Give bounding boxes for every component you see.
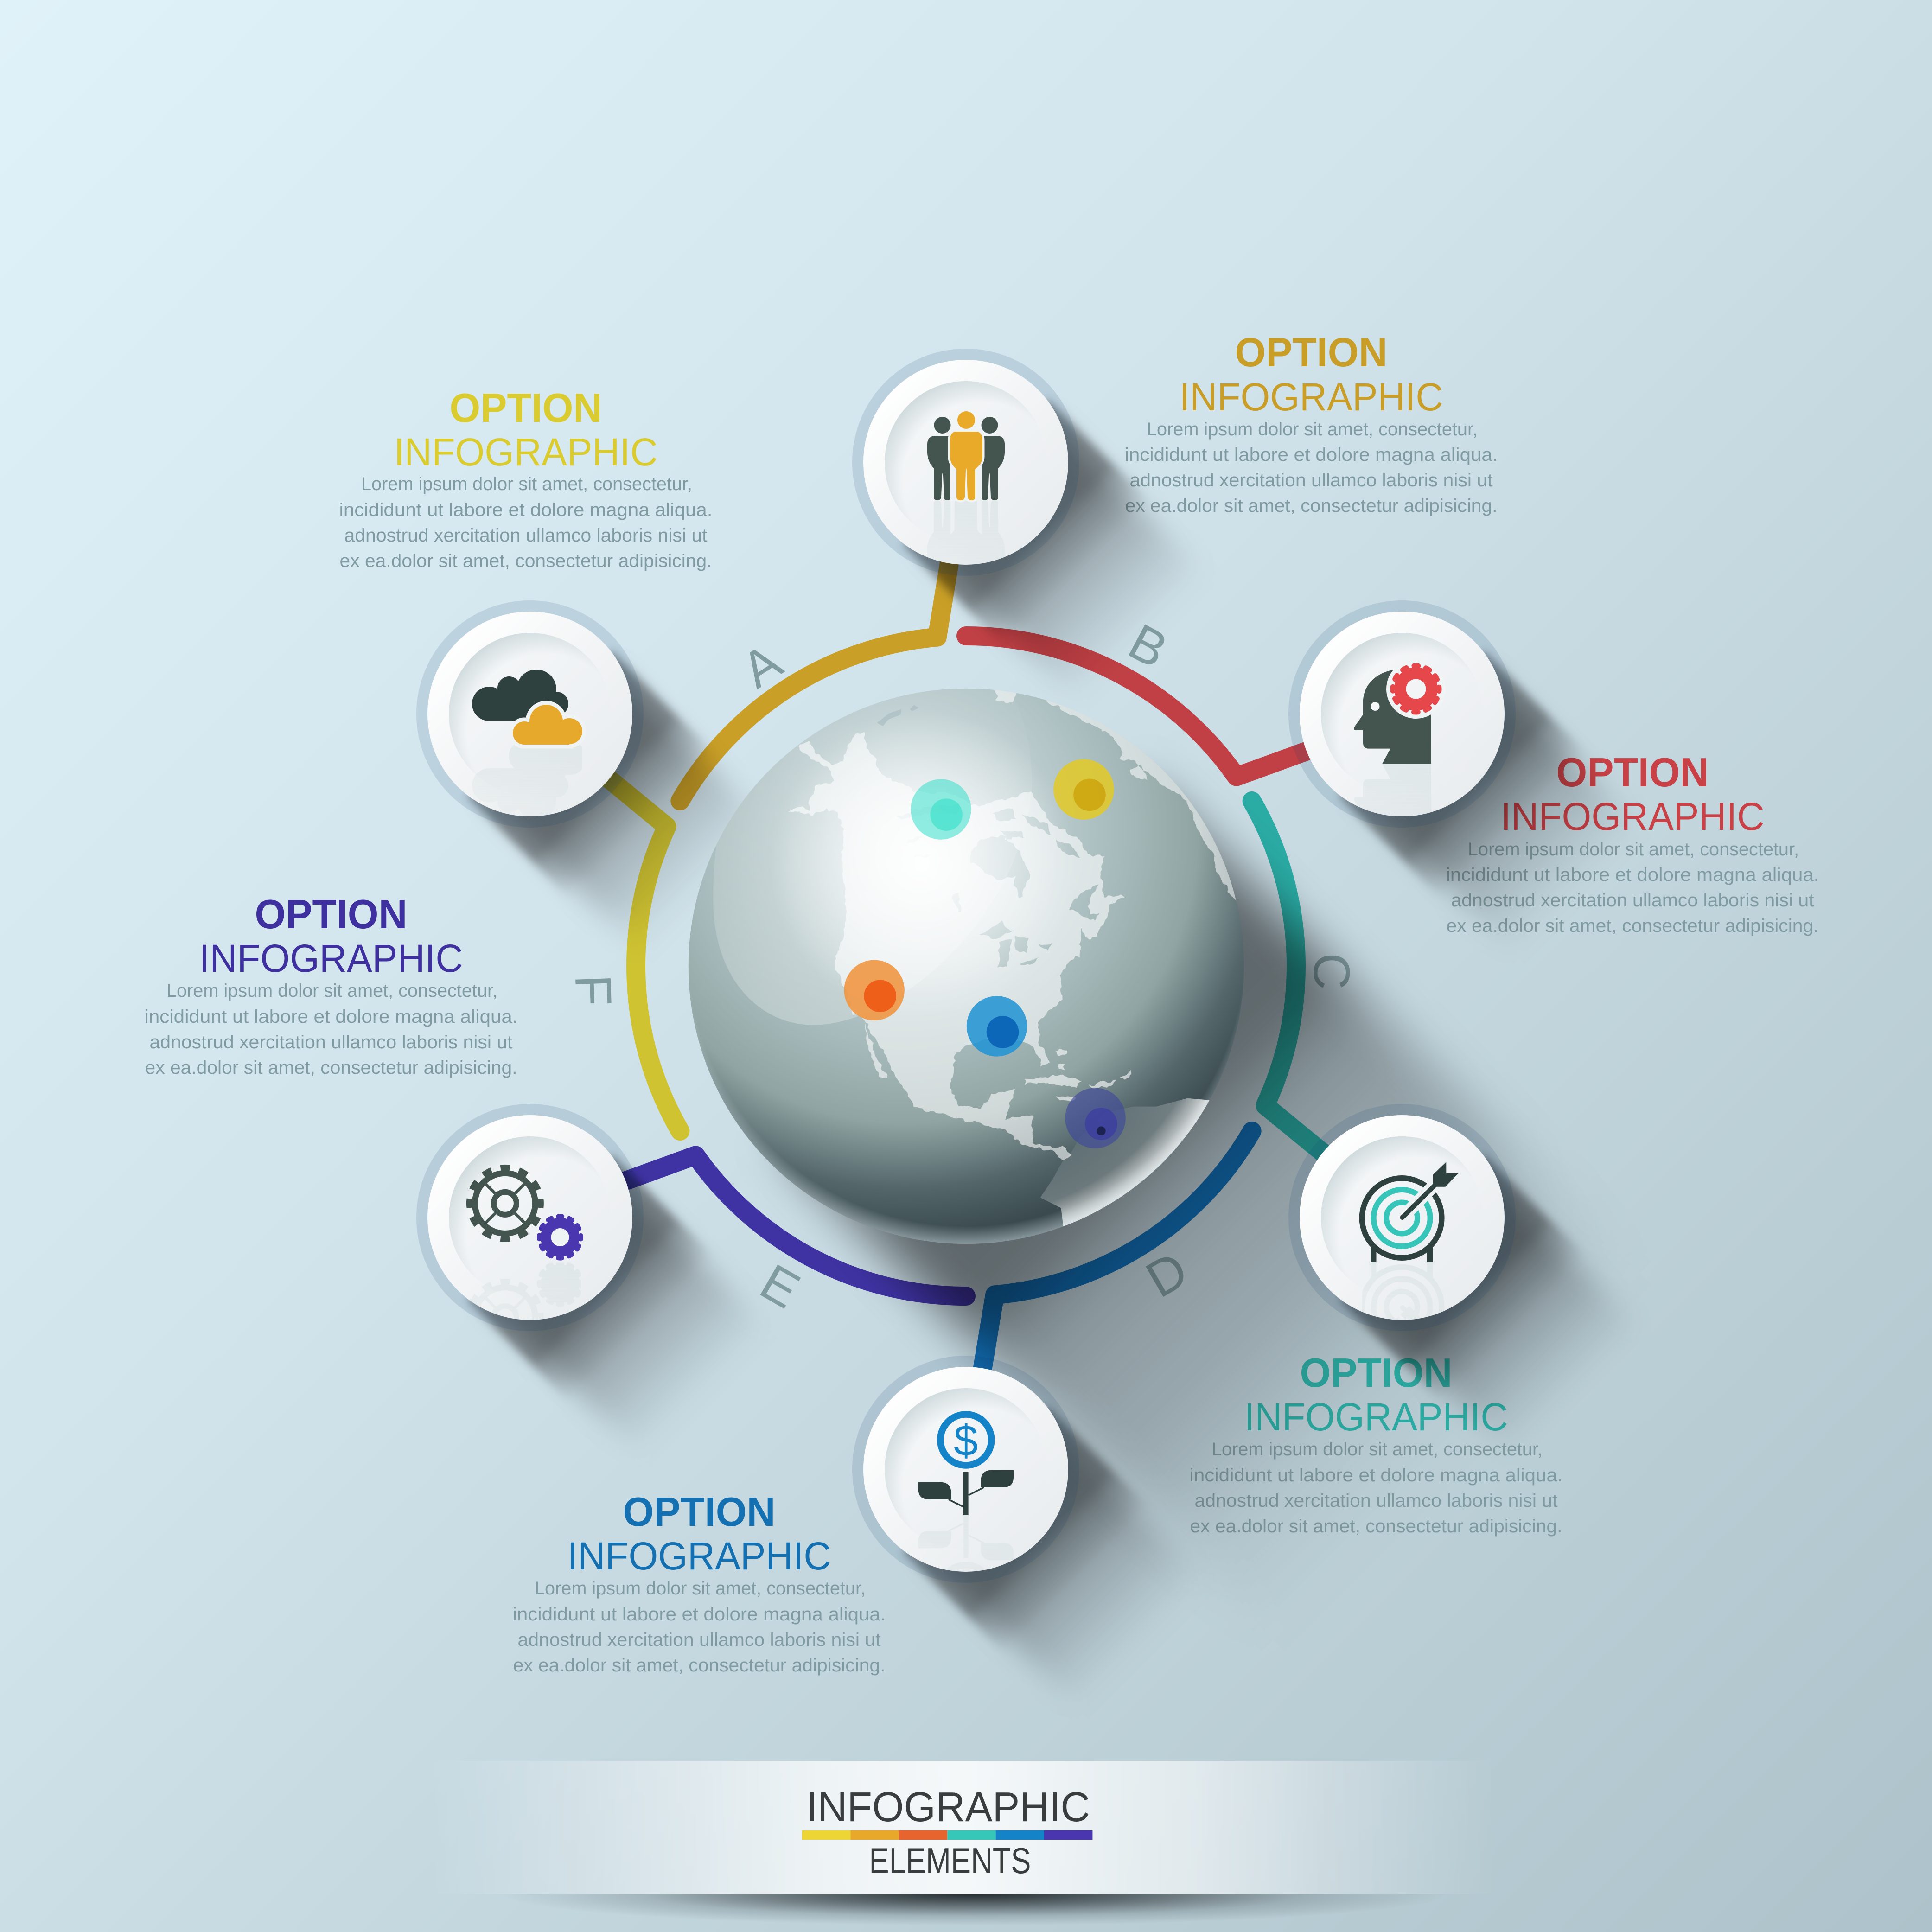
- text block red: incididunt ut labore et dolore magna aliqua.: [1446, 865, 1819, 885]
- heading: option gold: [1180, 329, 1443, 419]
- panel: option text blue: [513, 1489, 886, 1676]
- text block blue: adnostrud xercitation ullamco laboris nisi ut: [517, 1630, 881, 1650]
- text block gold: ex ea.dolor sit amet, consectetur adipisicing.: [1125, 496, 1498, 516]
- text block yellow: [339, 474, 712, 571]
- text block purple: incididunt ut labore et dolore magna aliqua.: [145, 1007, 517, 1027]
- panel: circle target: [1288, 1104, 1516, 1331]
- banner subtitle: ELEMENTS: [869, 1840, 1031, 1881]
- arc letters A to F: D: [1137, 1241, 1197, 1308]
- text block teal: Lorem ipsum dolor sit amet, consectetur,: [1211, 1439, 1543, 1460]
- pin: teal: [911, 779, 971, 840]
- heading: option gold: OPTION: [1235, 329, 1387, 375]
- text block red: adnostrud xercitation ullamco laboris nisi ut: [1451, 890, 1814, 911]
- icon: people: [927, 411, 1005, 500]
- heading: option red: [1500, 749, 1765, 838]
- arc letters A to F: F: [564, 974, 622, 1007]
- text block purple: adnostrud xercitation ullamco laboris nisi ut: [149, 1032, 513, 1052]
- text block yellow: Lorem ipsum dolor sit amet, consectetur,: [361, 474, 692, 494]
- text block blue: incididunt ut labore et dolore magna aliqua.: [513, 1604, 886, 1625]
- pin: blue: [967, 996, 1027, 1057]
- banner title: INFOGRAPHIC: [806, 1784, 1090, 1830]
- heading: option purple: [199, 891, 463, 980]
- icon: dollar plant: [918, 1414, 1014, 1515]
- pin: purple: [1065, 1088, 1126, 1148]
- banner: [431, 1761, 1498, 1926]
- heading: option red: OPTION: [1556, 749, 1709, 795]
- heading: option blue: [567, 1489, 831, 1578]
- arc letters A to F: A: [732, 632, 792, 699]
- globe long shadow: [783, 783, 1641, 1641]
- panel: circle people: [852, 349, 1079, 589]
- panel: option text red: [1446, 749, 1819, 936]
- panel: circle clouds: [416, 600, 644, 828]
- text block red: Lorem ipsum dolor sit amet, consectetur,: [1468, 839, 1799, 860]
- heading: option yellow: OPTION: [450, 385, 602, 431]
- text block blue: Lorem ipsum dolor sit amet, consectetur,: [535, 1578, 866, 1599]
- text block red: [1446, 839, 1819, 936]
- panel: option text purple: [145, 891, 517, 1078]
- text block yellow: adnostrud xercitation ullamco laboris nisi ut: [344, 525, 708, 546]
- text block purple: [145, 981, 517, 1078]
- icon: head with gear: [1354, 659, 1446, 764]
- text block teal: ex ea.dolor sit amet, consectetur adipisicing.: [1190, 1516, 1562, 1537]
- heading: option red: INFOGRAPHIC: [1500, 795, 1765, 838]
- arc letters A to F: B: [1120, 613, 1177, 679]
- heading: option teal: OPTION: [1300, 1350, 1452, 1396]
- heading: option yellow: [394, 385, 657, 474]
- text block blue: ex ea.dolor sit amet, consectetur adipisicing.: [513, 1655, 886, 1676]
- text block teal: adnostrud xercitation ullamco laboris nisi ut: [1194, 1491, 1558, 1511]
- text block gold: adnostrud xercitation ullamco laboris nisi ut: [1129, 470, 1493, 491]
- heading: option blue: OPTION: [623, 1489, 775, 1535]
- ring arcs with connectors: [530, 462, 1402, 1469]
- text block yellow: incididunt ut labore et dolore magna aliqua.: [339, 500, 712, 520]
- icon: clouds: [472, 670, 582, 745]
- arc letters A to F: [564, 613, 1360, 1320]
- icon: gears: [469, 1167, 581, 1258]
- heading: option gold: INFOGRAPHIC: [1180, 375, 1443, 419]
- heading: option purple: INFOGRAPHIC: [199, 937, 463, 980]
- panel: option text teal: [1190, 1350, 1562, 1537]
- text block gold: incididunt ut labore et dolore magna aliqua.: [1125, 445, 1498, 465]
- heading: option purple: OPTION: [255, 891, 407, 937]
- text block red: ex ea.dolor sit amet, consectetur adipisicing.: [1447, 916, 1818, 936]
- heading: option teal: [1244, 1350, 1508, 1439]
- heading: option yellow: INFOGRAPHIC: [394, 430, 657, 474]
- circle long shadows: [467, 400, 1651, 1719]
- panel: circle gears: [416, 1104, 644, 1353]
- text block gold: Lorem ipsum dolor sit amet, consectetur,: [1147, 419, 1478, 440]
- globe: [686, 674, 1270, 1270]
- text block purple: Lorem ipsum dolor sit amet, consectetur,: [166, 981, 497, 1001]
- arc letters A to F: C: [1303, 953, 1360, 990]
- arc letters A to F: E: [751, 1253, 809, 1320]
- panel: option text yellow: [339, 385, 712, 571]
- text block teal: [1190, 1439, 1562, 1537]
- text block yellow: ex ea.dolor sit amet, consectetur adipisicing.: [339, 551, 712, 571]
- panel: circle head: [1288, 600, 1516, 828]
- pin: yellow: [1053, 759, 1114, 820]
- icon: target with arrow: [1362, 1162, 1458, 1262]
- banner colour stripe: [802, 1830, 1092, 1840]
- pin: orange: [844, 960, 905, 1020]
- text block purple: ex ea.dolor sit amet, consectetur adipisicing.: [145, 1058, 517, 1078]
- panel: circle money plant: [852, 1356, 1079, 1616]
- text block blue: [513, 1578, 886, 1676]
- heading: option teal: INFOGRAPHIC: [1244, 1395, 1508, 1439]
- text block gold: [1125, 419, 1498, 516]
- panel: option text gold: [1125, 329, 1498, 516]
- heading: option blue: INFOGRAPHIC: [567, 1534, 831, 1578]
- text block teal: incididunt ut labore et dolore magna aliqua.: [1190, 1465, 1562, 1486]
